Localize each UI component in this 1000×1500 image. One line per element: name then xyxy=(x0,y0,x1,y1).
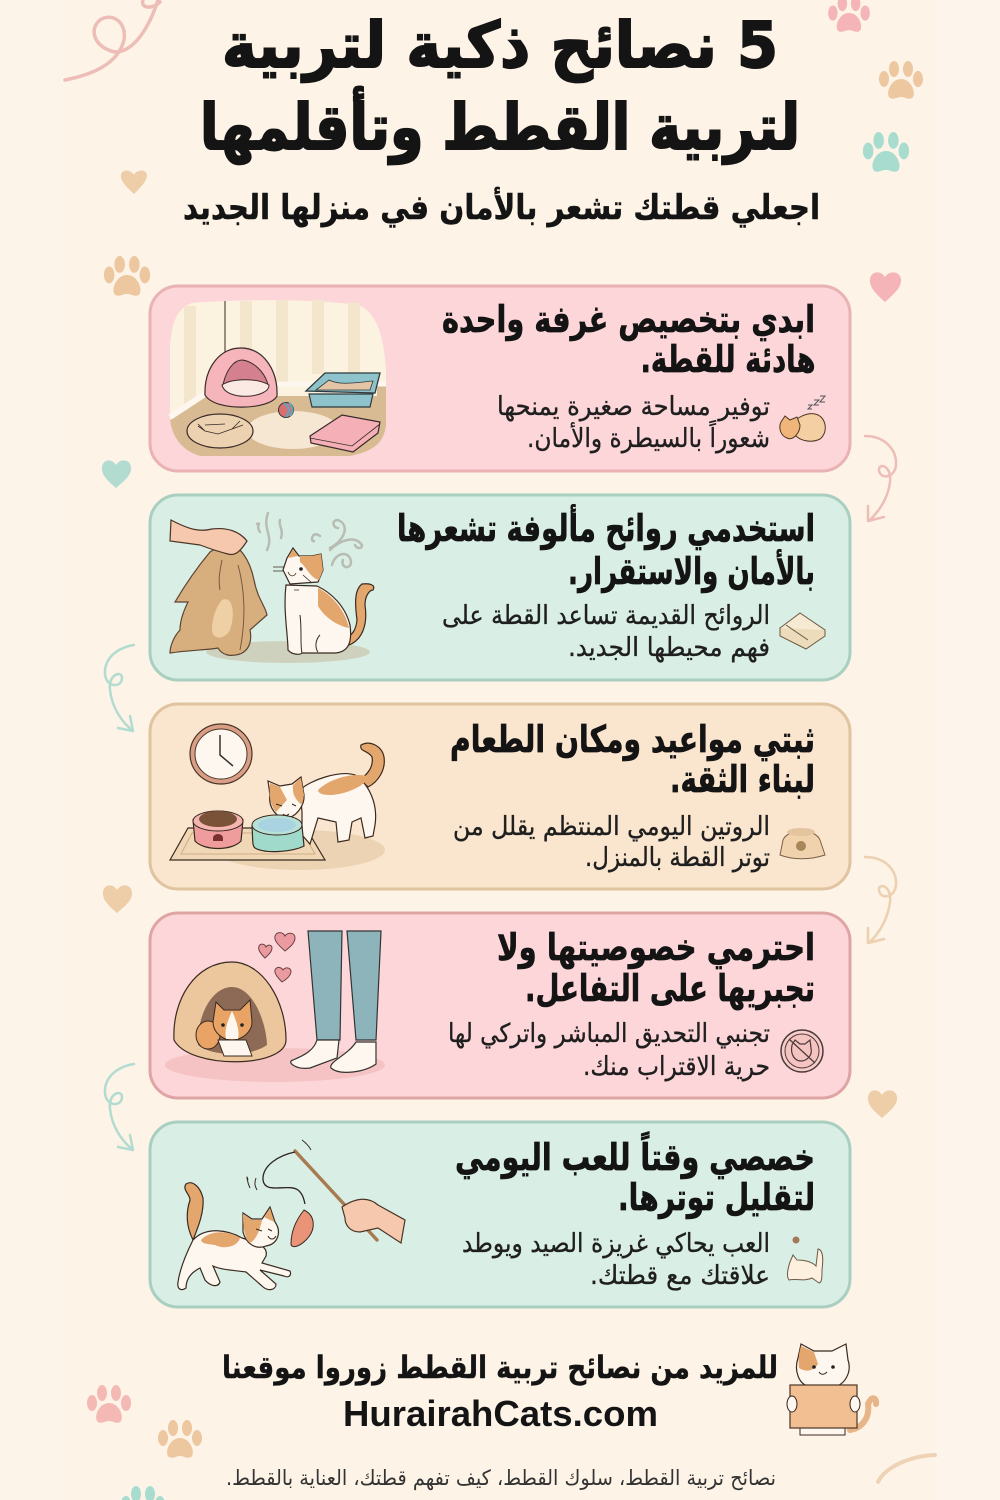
arrow: left mint xyxy=(105,645,134,731)
paw: left tan xyxy=(104,256,150,296)
footer call to action: HurairahCats.com xyxy=(343,1393,658,1434)
icon: pet bowl xyxy=(780,828,825,859)
ball xyxy=(278,402,294,418)
title xyxy=(200,9,800,165)
panel: tip 2 xyxy=(150,495,850,680)
heading xyxy=(397,504,815,593)
paw: top pink xyxy=(828,0,870,32)
arrow: left mint lower xyxy=(105,1064,134,1150)
icon: folded towel xyxy=(780,613,825,649)
heading xyxy=(442,298,816,381)
panel: tip 1 xyxy=(150,286,850,471)
paw: top tan xyxy=(879,61,923,99)
heading: خصصي وقتاً للعب اليومي xyxy=(455,1131,815,1179)
panel: tip 5 xyxy=(150,1122,850,1307)
description: تجنبي التحديق المباشر واتركي لها xyxy=(448,1019,770,1049)
icon: sleeping cat xyxy=(780,396,825,441)
legs xyxy=(291,931,381,1072)
panel: tip 3 xyxy=(150,704,850,889)
illustration: familiar scent xyxy=(170,513,374,663)
heart: tan right xyxy=(868,1090,897,1118)
description: توتر القطة بالمنزل. xyxy=(585,843,770,873)
description xyxy=(462,1229,770,1291)
pink cat bed xyxy=(205,348,277,407)
arrow: right tan xyxy=(865,857,896,943)
description xyxy=(442,601,770,663)
description: الروتين اليومي المنتظم يقلل من xyxy=(453,812,770,842)
heart: mint left xyxy=(102,460,131,488)
description: العب يحاكي غريزة الصيد ويوطد xyxy=(462,1229,770,1259)
description xyxy=(448,1019,770,1082)
heading: هادئة للقطة. xyxy=(640,338,816,381)
heading: استخدمي روائح مألوفة تشعرها xyxy=(397,504,815,550)
water bowl xyxy=(252,815,304,852)
heading: ابدي بتخصيص غرفة واحدة xyxy=(442,298,815,341)
panel: tip 4 xyxy=(150,913,850,1098)
scent swirls xyxy=(257,513,362,567)
litter box xyxy=(306,373,380,407)
subtitle: اجعلي قطتك تشعر بالأمان في منزلها الجديد xyxy=(183,186,820,228)
wand xyxy=(189,1140,377,1247)
heading: لتقليل توترها. xyxy=(618,1176,815,1219)
arrow: right pink xyxy=(865,436,896,521)
icon: no staring xyxy=(781,1030,823,1072)
footer keywords: نصائح تربية القطط، سلوك القطط، كيف تفهم قطتك، العناية بالقطط. xyxy=(226,1466,776,1491)
paw: bottom mint xyxy=(121,1486,165,1500)
footer call to action xyxy=(222,1350,778,1434)
heading: تجبريها على التفاعل. xyxy=(525,967,815,1010)
footer cat holding sign xyxy=(787,1344,876,1435)
heart: tan left xyxy=(103,885,132,913)
cat sitting xyxy=(273,548,374,654)
heading: احترمي خصوصيتها ولا xyxy=(497,926,815,969)
paw: bottom tan xyxy=(158,1420,202,1458)
paw: bottom pink xyxy=(87,1385,131,1423)
towel xyxy=(170,542,267,655)
illustration: feeding routine xyxy=(170,724,385,870)
decoration: top-left pink curl xyxy=(65,0,160,80)
icon: jumping cat xyxy=(787,1236,823,1283)
description: شعوراً بالسيطرة والأمان. xyxy=(527,419,770,454)
heart: pink right xyxy=(870,272,901,302)
round cushion xyxy=(187,414,253,448)
hand xyxy=(342,1199,405,1243)
title: 5 نصائح ذكية لتربية xyxy=(222,9,778,82)
hand xyxy=(170,520,247,554)
pink blanket xyxy=(310,415,380,452)
decoration: bottom-right arc xyxy=(878,1455,935,1482)
description: الروائح القديمة تساعد القطة على xyxy=(442,601,770,631)
hearts xyxy=(259,933,295,982)
playing cat xyxy=(178,1183,291,1290)
description: حرية الاقتراب منك. xyxy=(583,1052,770,1082)
illustration: respecting privacy xyxy=(165,931,385,1082)
description: توفير مساحة صغيرة يمنحها xyxy=(497,392,770,422)
heading: لبناء الثقة. xyxy=(670,758,815,801)
paw: top mint xyxy=(863,132,909,172)
description: فهم محيطها الجديد. xyxy=(568,633,770,663)
title: لتربية القطط وتأقلمها xyxy=(200,86,800,165)
description xyxy=(497,392,770,454)
clock xyxy=(190,724,252,784)
heading: ثبتي مواعيد ومكان الطعام xyxy=(450,718,815,762)
description: علاقتك مع قطتك. xyxy=(590,1261,770,1291)
heading xyxy=(455,1131,815,1219)
heart: tan top xyxy=(121,170,147,194)
description xyxy=(453,812,770,873)
food bowl xyxy=(193,811,243,848)
illustration: playing with wand xyxy=(178,1140,405,1290)
footer call to action: للمزيد من نصائح تربية القطط زوروا موقعنا xyxy=(222,1350,778,1386)
cat eating xyxy=(268,743,384,844)
mat xyxy=(170,828,325,860)
cat house xyxy=(174,962,286,1062)
heading xyxy=(497,926,815,1010)
heading xyxy=(450,718,815,801)
heading: بالأمان والاستقرار. xyxy=(568,548,815,593)
illustration: quiet room xyxy=(170,300,386,456)
